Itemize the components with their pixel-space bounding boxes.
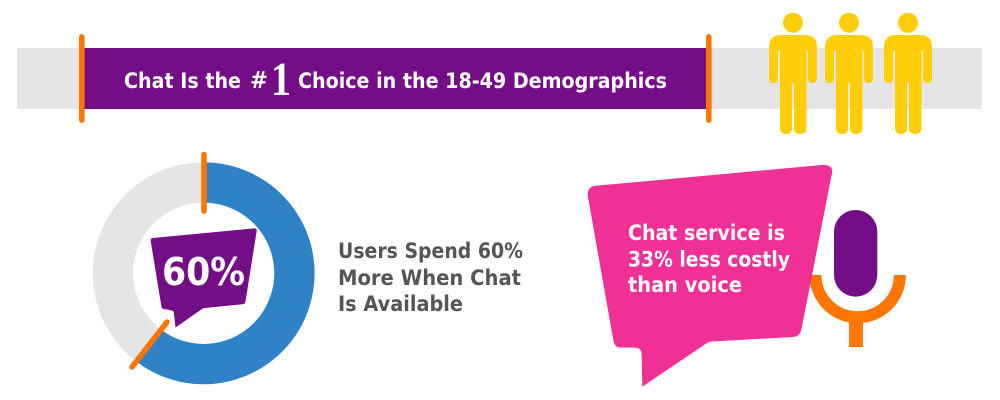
- orange marker top of donut: [201, 154, 207, 211]
- orange marker right: [706, 34, 712, 123]
- microphone capsule: [834, 210, 877, 297]
- callout text: Chat service is: [628, 221, 785, 245]
- icon: three people: [769, 13, 932, 134]
- callout text: than voice: [628, 273, 742, 297]
- statistic text: users spend more: More When Chat: [338, 266, 521, 291]
- banner heading: 1: [271, 53, 291, 106]
- orange marker lower left of donut: [132, 322, 167, 367]
- speech bubble with 60%: [151, 228, 257, 328]
- statistic text: users spend more: [338, 239, 523, 317]
- speech bubble with 60%: 60%: [162, 250, 245, 294]
- banner heading: [124, 53, 667, 106]
- purple banner progress bar: [81, 48, 707, 109]
- callout text: 33% less costly: [628, 248, 790, 272]
- grey banner background: [17, 48, 982, 109]
- icon: person 2: [825, 13, 873, 134]
- pink speech bubble: [588, 165, 832, 387]
- statistic text: users spend more: Is Available: [338, 292, 463, 317]
- microphone stand: [816, 275, 900, 317]
- banner heading: Choice in the 18-49 Demographics: [298, 69, 667, 94]
- banner heading: #: [250, 68, 268, 94]
- statistic text: users spend more: Users Spend 60%: [338, 239, 523, 264]
- banner heading: Chat Is the: [124, 69, 241, 94]
- icon: person 3: [884, 13, 932, 134]
- donut chart: 60 percent: [113, 182, 294, 364]
- callout text: [628, 221, 790, 297]
- orange marker left: [79, 34, 85, 123]
- microphone icon: [816, 210, 900, 347]
- icon: person 1: [769, 13, 817, 134]
